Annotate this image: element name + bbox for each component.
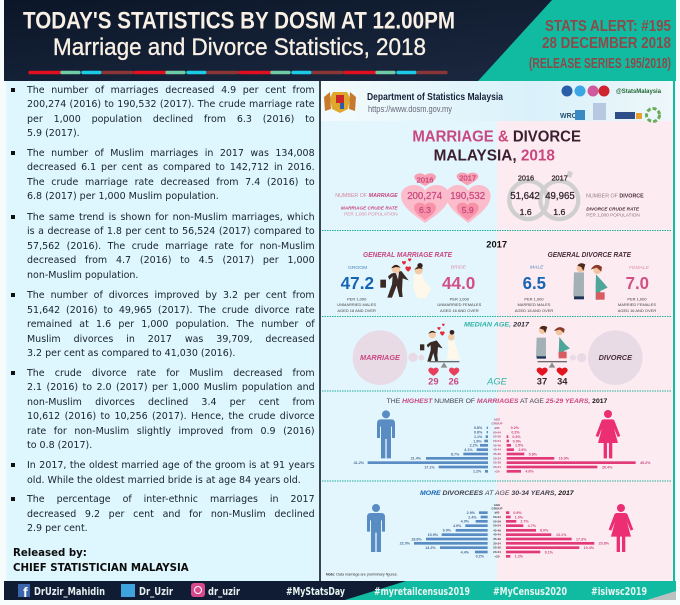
- female percentages: 45.2%: [640, 461, 651, 465]
- age group labels: [492, 418, 502, 473]
- male percentages: 2.4%: [468, 515, 477, 519]
- text block: statistics bullets: The same trend is shown for non-Muslim marriages, which: [27, 212, 315, 223]
- groom stat: GROOM: [348, 265, 367, 271]
- female percentages: 17.3%: [576, 537, 587, 541]
- note: Note: Data marriage are preliminary figures.: [326, 572, 398, 576]
- text block: statistics bullets: [11, 85, 315, 574]
- text block: statistics bullets: 2.9 per cent.: [27, 523, 88, 534]
- footer bar: dr_uzir: [208, 586, 241, 598]
- male percentages: 2.9%: [467, 511, 476, 515]
- icon: facebook: [18, 584, 30, 600]
- icon: instagram: [191, 583, 205, 597]
- divorce rings: [509, 171, 578, 219]
- male percentages: 9.9%: [443, 529, 452, 533]
- marriage labels: NUMBER OF MARRIAGE: [335, 193, 398, 199]
- subtitle: Marriage and Divorce Statistics, 2018: [53, 34, 426, 61]
- bride stat: BRIDE: [451, 264, 467, 270]
- marriage ages: 26: [448, 377, 459, 387]
- text block: statistics bullets: 5.9 (2017).: [27, 128, 80, 139]
- divorce rings: 1.6: [520, 207, 532, 217]
- groom stat: AGED 18 AND OVER: [337, 308, 376, 313]
- divorce rings: 1.6: [553, 207, 566, 217]
- icon: woman: [596, 410, 620, 458]
- text block: statistics bullets: Muslim divorces in 2017 was 39,709, decreased: [27, 334, 315, 345]
- section dividers: [322, 230, 672, 481]
- marriage hearts: 190,532: [450, 191, 485, 202]
- divorce labels: DIVORCE CRUDE RATE: [586, 207, 640, 212]
- bullet 6: oldest married age: [11, 460, 315, 486]
- text block: statistics bullets: is a decrease of 1.8 per cent to 56,524 (2017) compared to: [27, 226, 315, 237]
- text block: statistics bullets: decreased 9.2 per cent and for non-Muslim declined: [27, 509, 315, 520]
- male divorce stat: AGED 18 AND OVER: [515, 308, 553, 313]
- marriage hearts: 2016: [416, 175, 434, 184]
- male divorce stat: MALE: [530, 265, 544, 271]
- age group labels: 40-44: [493, 448, 501, 452]
- divorce ages: 34: [557, 377, 568, 387]
- marriage circle: MARRIAGE: [360, 353, 401, 362]
- chart: marriages by age group: [354, 398, 651, 474]
- female divorce stat: MARRIED FEMALES: [618, 302, 656, 307]
- male percentages: 17.1%: [424, 465, 435, 469]
- female percentages: 2.7%: [520, 520, 529, 524]
- text block: statistics bullets: The number of divorces improved by 3.2 per cent from: [27, 290, 315, 301]
- female percentages: 19.4%: [584, 546, 595, 550]
- general divorce rate heading: GENERAL DIVORCE RATE: [548, 250, 632, 259]
- text block: statistics bullets: 6.8 (2017) per 1,000 Muslim population.: [27, 191, 219, 202]
- text block: statistics bullets: 200,274 (2016) to 190,532 (2017). The crude marriage rate: [27, 99, 315, 110]
- female percentages: [511, 426, 651, 474]
- male percentages: 0.6%: [474, 430, 483, 434]
- age group labels: 25-29: [493, 546, 501, 550]
- chart title: MORE DIVORCEES AT AGE 30-34 YEARS, 2017: [420, 490, 574, 497]
- age group labels: AGE: [494, 418, 500, 422]
- age group labels: GROUP: [492, 507, 502, 511]
- age group labels: 35-39: [493, 537, 501, 541]
- female percentages: 4.7%: [528, 524, 537, 528]
- bride stat: [437, 264, 482, 313]
- male percentages: 0.2%: [476, 555, 485, 559]
- male percentages: 1.1%: [474, 435, 483, 439]
- male percentages: 1.2%: [473, 470, 482, 474]
- header banner: [4, 0, 676, 81]
- text block: statistics bullets: The number of Muslim marriages in 2017 was 134,008: [27, 148, 315, 159]
- male divorce stat: 6.5: [523, 273, 546, 293]
- marriage labels: MARRIAGE CRUDE RATE: [341, 205, 399, 210]
- male percentages: 14.2%: [425, 546, 436, 550]
- female percentages: 26.4%: [602, 465, 613, 469]
- male percentages: 4.1%: [464, 448, 473, 452]
- year heading: 2017: [486, 239, 507, 249]
- icon: man: [377, 410, 395, 458]
- icon: separated couple: [573, 263, 608, 300]
- text block: statistics bullets: non-Muslim population.: [27, 270, 138, 281]
- age group labels: ≥65: [494, 511, 500, 515]
- male divorce stat: [515, 265, 553, 313]
- icon: man: [367, 504, 385, 552]
- general marriage rate heading: GENERAL MARRIAGE RATE: [363, 250, 453, 259]
- age group labels: <20: [494, 469, 500, 473]
- text block: statistics bullets: The crude marriage rate decreased from 7.4 (2016) to: [27, 177, 315, 188]
- age group labels: 55-59: [493, 435, 501, 439]
- groom stat: 47.2: [341, 273, 374, 293]
- hashtags: [286, 585, 647, 598]
- divorce labels: PER 1,000 POPULATION: [586, 212, 640, 217]
- text block: statistics bullets: The crude divorce rate for Muslim decreased from: [27, 368, 315, 379]
- male divorce stat: PER 1,000: [524, 296, 544, 301]
- male percentages: 2.2%: [470, 444, 479, 448]
- female percentages: 13.1%: [556, 533, 567, 537]
- marriage labels: PER 1,000 POPULATION: [344, 211, 398, 216]
- marriage hearts: [401, 173, 491, 223]
- text block: statistics bullets: The percentage of inter-ethnic marriages in 2017: [27, 494, 315, 505]
- chart: divorces by age group: [326, 490, 633, 576]
- divorce circle: [570, 330, 643, 385]
- divorce rings: 49,965: [545, 191, 575, 202]
- divorce labels: NUMBER OF DIVORCE: [586, 194, 644, 200]
- text block: statistics bullets: 2.1 (2016) to 2.0 (2017) per 1,000 Muslim population and: [27, 382, 315, 393]
- age group labels: ≥65: [494, 426, 500, 430]
- bullet 1: marriages: [11, 85, 315, 139]
- male percentages: 1.8%: [473, 439, 482, 443]
- social icons and partner logos: @StatsMalaysia: [616, 89, 662, 95]
- footer bar: Dr_Uzir: [139, 586, 174, 598]
- chart title: THE HIGHEST NUMBER OF MARRIAGES AT AGE 25-29 YEARS, 2017: [387, 398, 608, 405]
- marriage ages: 29: [428, 377, 439, 387]
- text block: statistics bullets: In 2017, the oldest married age of the groom is at 91 years: [27, 460, 315, 471]
- text block: statistics bullets: CHIEF STATISTICIAN MALAYSIA: [13, 563, 189, 574]
- divorce rings: 2017: [551, 174, 568, 183]
- male percentages: 4.4%: [461, 550, 470, 554]
- marriage hearts: 2017: [459, 174, 476, 183]
- male bars: [414, 511, 488, 553]
- hashtags: #MyCensus2020: [493, 585, 567, 598]
- age label: AGE: [486, 376, 508, 386]
- groom stat: PER 1,000: [347, 296, 367, 301]
- female percentages: 1.2%: [515, 555, 524, 559]
- released by: [13, 548, 189, 574]
- left panel background: [6, 81, 320, 581]
- age group labels: 60-64: [493, 515, 501, 519]
- title: TODAY'S STATISTICS BY DOSM AT 12.00PM: [23, 8, 455, 34]
- female divorce stat: [618, 265, 656, 313]
- text block: statistics bullets: 3.2 per cent as compared to 41,030 (2016).: [27, 348, 235, 359]
- divorce labels: [586, 194, 644, 217]
- age group labels: GROUP: [492, 421, 502, 425]
- text block: statistics bullets: Released by:: [13, 548, 87, 559]
- bullet 4: divorces: [11, 290, 315, 359]
- icon: couple on balance: [420, 324, 461, 368]
- age group labels: 45-49: [493, 443, 501, 447]
- female bars: [507, 435, 636, 473]
- male percentages: 8.7%: [451, 452, 460, 456]
- text block: statistics bullets: old. While the oldest married bride is at age 84 years old.: [27, 475, 301, 486]
- female percentages: 0.9%: [513, 439, 522, 443]
- age group labels: 35-39: [493, 452, 501, 456]
- marriage labels: [335, 193, 399, 216]
- marriage hearts: 6.3: [419, 205, 431, 215]
- female divorce stat: PER 1,000: [627, 296, 647, 301]
- divorce rings: 2016: [518, 174, 534, 183]
- heading: MALAYSIA, 2018: [434, 148, 555, 165]
- marriage ages: [428, 368, 459, 387]
- age group labels: 45-49: [493, 528, 501, 532]
- social icons and partner logos: WRC: [560, 113, 577, 120]
- age group labels: 30-34: [493, 541, 501, 545]
- female percentages: 5.8%: [529, 452, 538, 456]
- age group labels: 50-54: [493, 524, 501, 528]
- age group labels: 20-24: [493, 465, 501, 469]
- male percentages: [354, 426, 483, 474]
- male bars: [368, 427, 488, 473]
- marriage hearts: 200,274: [407, 191, 443, 202]
- female percentages: 0.2%: [511, 426, 520, 430]
- divorce circle: DIVORCE: [599, 353, 633, 362]
- text block: statistics bullets: remained at 1.6 per 1,000 population. The number of: [27, 319, 315, 330]
- hashtags: #MyStatsDay: [286, 585, 345, 598]
- text block: statistics bullets: 57,562 (2016). The crude marriage rate for non-Muslim: [27, 241, 315, 252]
- age group labels: <20: [494, 554, 500, 558]
- icon: woman: [609, 504, 633, 552]
- bullet 2: muslim marriages: [11, 148, 315, 202]
- heading: [412, 128, 581, 165]
- icon: bride and groom: [380, 258, 431, 298]
- divorce rings: 51,642: [510, 191, 540, 202]
- male percentages: 21.4%: [411, 457, 422, 461]
- bride stat: PER 1,000: [450, 296, 470, 301]
- female percentages: 8.0%: [540, 529, 549, 533]
- bride stat: AGED 16 AND OVER: [440, 308, 479, 313]
- bride stat: UNMARRIED FEMALES: [437, 302, 482, 307]
- marriage circle: [353, 330, 424, 385]
- section: marriage and divorce totals: [335, 128, 644, 223]
- age group labels: 30-34: [493, 456, 501, 460]
- male percentages: 18.6%: [411, 537, 422, 541]
- text block: statistics bullets: per 1,000 population declined from 6.3 (2016) to: [27, 114, 315, 125]
- divorce ages: 37: [537, 377, 547, 387]
- female divorce stat: FEMALE: [629, 265, 650, 271]
- median age heading: MEDIAN AGE, 2017: [464, 321, 529, 328]
- male percentages: 41.2%: [354, 461, 365, 465]
- section: median age: [353, 321, 643, 387]
- male percentages: 22.0%: [400, 542, 411, 546]
- female percentages: 4.6%: [525, 470, 534, 474]
- social icons and partner logos: [560, 86, 662, 122]
- icon: malaysian crest: [324, 92, 356, 113]
- female percentages: 1.5%: [515, 444, 524, 448]
- hashtags: #isiwsc2019: [591, 585, 647, 598]
- text block: statistics bullets: rate for non-Muslim slightly improved from 0.9 (2016): [27, 426, 315, 437]
- age group labels: 25-29: [493, 461, 501, 465]
- footer bar: [4, 581, 676, 600]
- agency logo and name: [324, 92, 503, 114]
- female percentages: 0.2%: [511, 430, 520, 434]
- text block: statistics bullets: decreased 6.1 per cent as compared to 142,712 in 2016.: [27, 162, 315, 173]
- female percentages: 16.9%: [559, 457, 570, 461]
- female percentages: 0.3%: [512, 435, 521, 439]
- male percentages: 15.9%: [428, 533, 439, 537]
- male divorce stat: MARRIED MALES: [517, 302, 551, 307]
- text block: statistics bullets: 10,612 (2016) to 10,256 (2017). Hence, the crude divorce: [27, 411, 315, 422]
- female percentages: 0.9%: [513, 511, 522, 515]
- heading: MARRIAGE & DIVORCE: [412, 128, 581, 145]
- age group labels: 60-64: [493, 430, 501, 434]
- agency logo and name: Department of Statistics Malaysia: [367, 92, 503, 103]
- female divorce stat: AGED 16 AND OVER: [618, 308, 656, 313]
- female divorce stat: 7.0: [626, 273, 649, 293]
- age group labels: AGE: [494, 503, 500, 507]
- age group labels: 50-54: [493, 439, 501, 443]
- section: general rates: [337, 239, 656, 313]
- stats alert: [529, 18, 671, 72]
- female bars: [506, 511, 594, 558]
- icon: separated couple on balance: [536, 326, 570, 368]
- female percentages: 23.8%: [599, 542, 610, 546]
- text block: statistics bullets: decreased from 4.7 (2016) to 4.5 (2017) per 1,000: [27, 255, 315, 266]
- age group labels: 20-24: [493, 550, 501, 554]
- bride stat: 44.0: [442, 273, 475, 293]
- female percentages: 2.6%: [518, 448, 527, 452]
- bullet 3: non-muslim marriages: [11, 212, 315, 281]
- groom stat: [337, 265, 376, 313]
- text block: statistics bullets: 51,642 (2016) to 49,965 (2017). The crude divorce rate: [27, 305, 315, 316]
- male percentages: 0.8%: [474, 426, 483, 430]
- female percentages: 1.0%: [515, 515, 524, 519]
- marriage hearts: 5.9: [462, 205, 474, 215]
- icon: facebook: f: [23, 584, 28, 600]
- groom stat: UNMARRIED MALES: [337, 302, 376, 307]
- agency logo and name: https://www.dosm.gov.my: [368, 104, 452, 114]
- age group labels: 40-44: [493, 533, 501, 537]
- header stripes: [30, 71, 446, 74]
- icon: twitter: [121, 584, 135, 597]
- text block: statistics bullets: to 0.8 (2017).: [27, 440, 92, 451]
- footer bar: DrUzir_Mahidin: [34, 586, 105, 598]
- text block: statistics bullets: non-Muslim divorces declined 3.4 per cent from: [27, 397, 315, 408]
- hashtags: #myretailcensus2019: [374, 585, 470, 598]
- right panel background: [319, 81, 675, 581]
- age group labels: [492, 503, 502, 558]
- male percentages: [400, 511, 485, 559]
- divorce ages: [537, 368, 568, 387]
- text block: statistics bullets: The number of marriages decreased 4.9 per cent from: [27, 85, 315, 96]
- male percentages: 4.9%: [453, 524, 462, 528]
- female percentages: 9.1%: [545, 550, 554, 554]
- age group labels: 55-59: [493, 519, 501, 523]
- male percentages: 4.0%: [461, 520, 470, 524]
- bullet 7: inter-ethnic marriages: [11, 494, 315, 534]
- bullet 5: divorce rate: [11, 368, 315, 451]
- female percentages: [513, 511, 610, 559]
